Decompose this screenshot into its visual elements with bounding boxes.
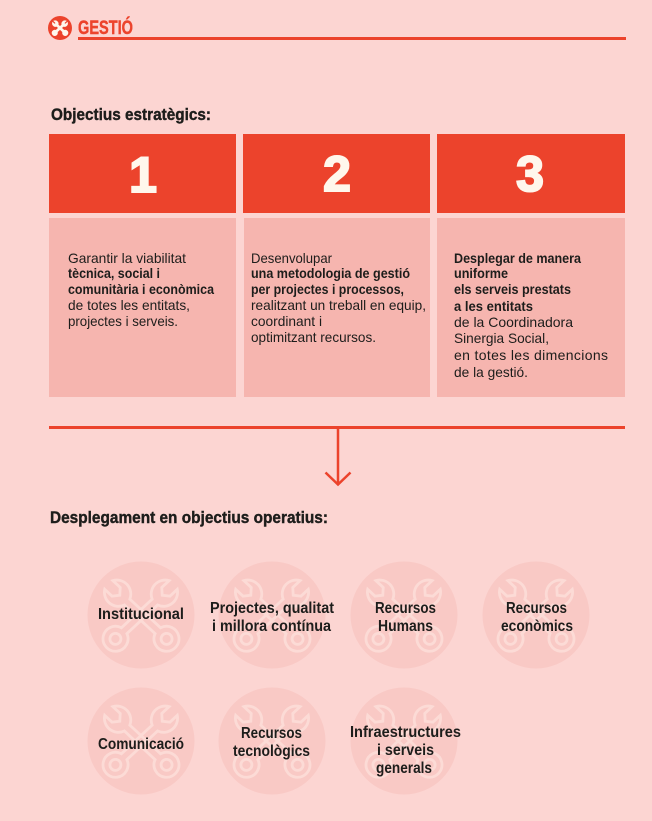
text block 2 <box>244 218 430 397</box>
circle: Recursos tecnològics: tecnològics <box>233 743 310 760</box>
text block 1: comunitària i econòmica <box>68 281 214 297</box>
text block 2: una metodologia de gestió <box>251 265 410 281</box>
circle: Institucional <box>88 562 194 668</box>
circle: Recursos Humans <box>350 562 458 668</box>
text block 1: Garantir la viabilitat <box>68 250 186 266</box>
circle: Recursos econòmics: Recursos <box>506 600 567 617</box>
circle: Recursos econòmics <box>482 562 590 668</box>
text block 1: de totes les entitats, <box>68 297 190 313</box>
text block 2: per projectes i processos, <box>251 281 404 297</box>
text block 2: Desenvolupar <box>251 250 332 266</box>
number box 3 <box>437 134 625 213</box>
heading: operational objectives: Desplegament en objectius operatius: <box>50 509 328 527</box>
text block 3 <box>437 218 625 397</box>
number box 3: 3 <box>516 146 544 202</box>
text block 3: Sinergia Social, <box>454 330 549 346</box>
circle: Institucional: Institucional <box>98 606 184 623</box>
circle: Recursos Humans: Recursos <box>375 600 436 617</box>
panel: objective 2 <box>243 134 430 397</box>
arrow: divider down to operational objectives <box>49 428 625 484</box>
text block 2: optimitzant recursos. <box>251 329 376 345</box>
number box 2 <box>243 134 430 213</box>
number box 1: 1 <box>129 147 157 203</box>
text block 3: en totes les dimencions <box>454 347 608 363</box>
icon: crossed wrenches badge <box>48 16 72 40</box>
section header: Gestió <box>48 16 626 40</box>
text block 3: a les entitats <box>454 298 533 314</box>
text block 3: de la Coordinadora <box>454 314 573 330</box>
text block 1: projectes i serveis. <box>68 313 178 329</box>
number box 2: 2 <box>323 146 351 202</box>
circle: Projectes, qualitat i millora contínua <box>210 562 334 668</box>
heading: strategic objectives: Objectius estratègics: <box>51 106 211 124</box>
text block 2: realitzant un treball en equip, <box>251 297 426 313</box>
circle: Infraestructures i serveis generals: generals <box>376 760 432 777</box>
text block 3: uniforme <box>454 265 508 281</box>
heading: Gestió: GESTIÓ <box>78 17 133 39</box>
panel: objective 1 <box>49 134 236 397</box>
circle: Comunicació <box>88 688 194 794</box>
text block 3: de la gestió. <box>454 364 528 380</box>
text block 1 <box>49 218 236 397</box>
circle: Recursos econòmics: econòmics <box>501 618 573 635</box>
text block 3: els serveis prestats <box>454 281 571 297</box>
number box 1 <box>49 134 236 213</box>
circle: Comunicació: Comunicació <box>98 736 184 753</box>
text block 1: tècnica, social i <box>68 265 160 281</box>
circle: Recursos tecnològics: Recursos <box>241 725 302 742</box>
circle: Infraestructures i serveis generals: Infraestructures <box>350 724 461 741</box>
panel: objective 3 <box>437 134 625 397</box>
circle: Infraestructures i serveis generals <box>350 688 461 794</box>
text block 2: coordinant i <box>251 313 322 329</box>
circle: Recursos Humans: Humans <box>378 618 433 635</box>
circle: Projectes, qualitat i millora contínua: i millora contínua <box>212 618 331 635</box>
circle: Projectes, qualitat i millora contínua: Projectes, qualitat <box>210 600 334 617</box>
circle: Recursos tecnològics <box>218 688 326 794</box>
circle: Infraestructures i serveis generals: i serveis <box>377 742 434 759</box>
text block 3: Desplegar de manera <box>454 250 581 266</box>
